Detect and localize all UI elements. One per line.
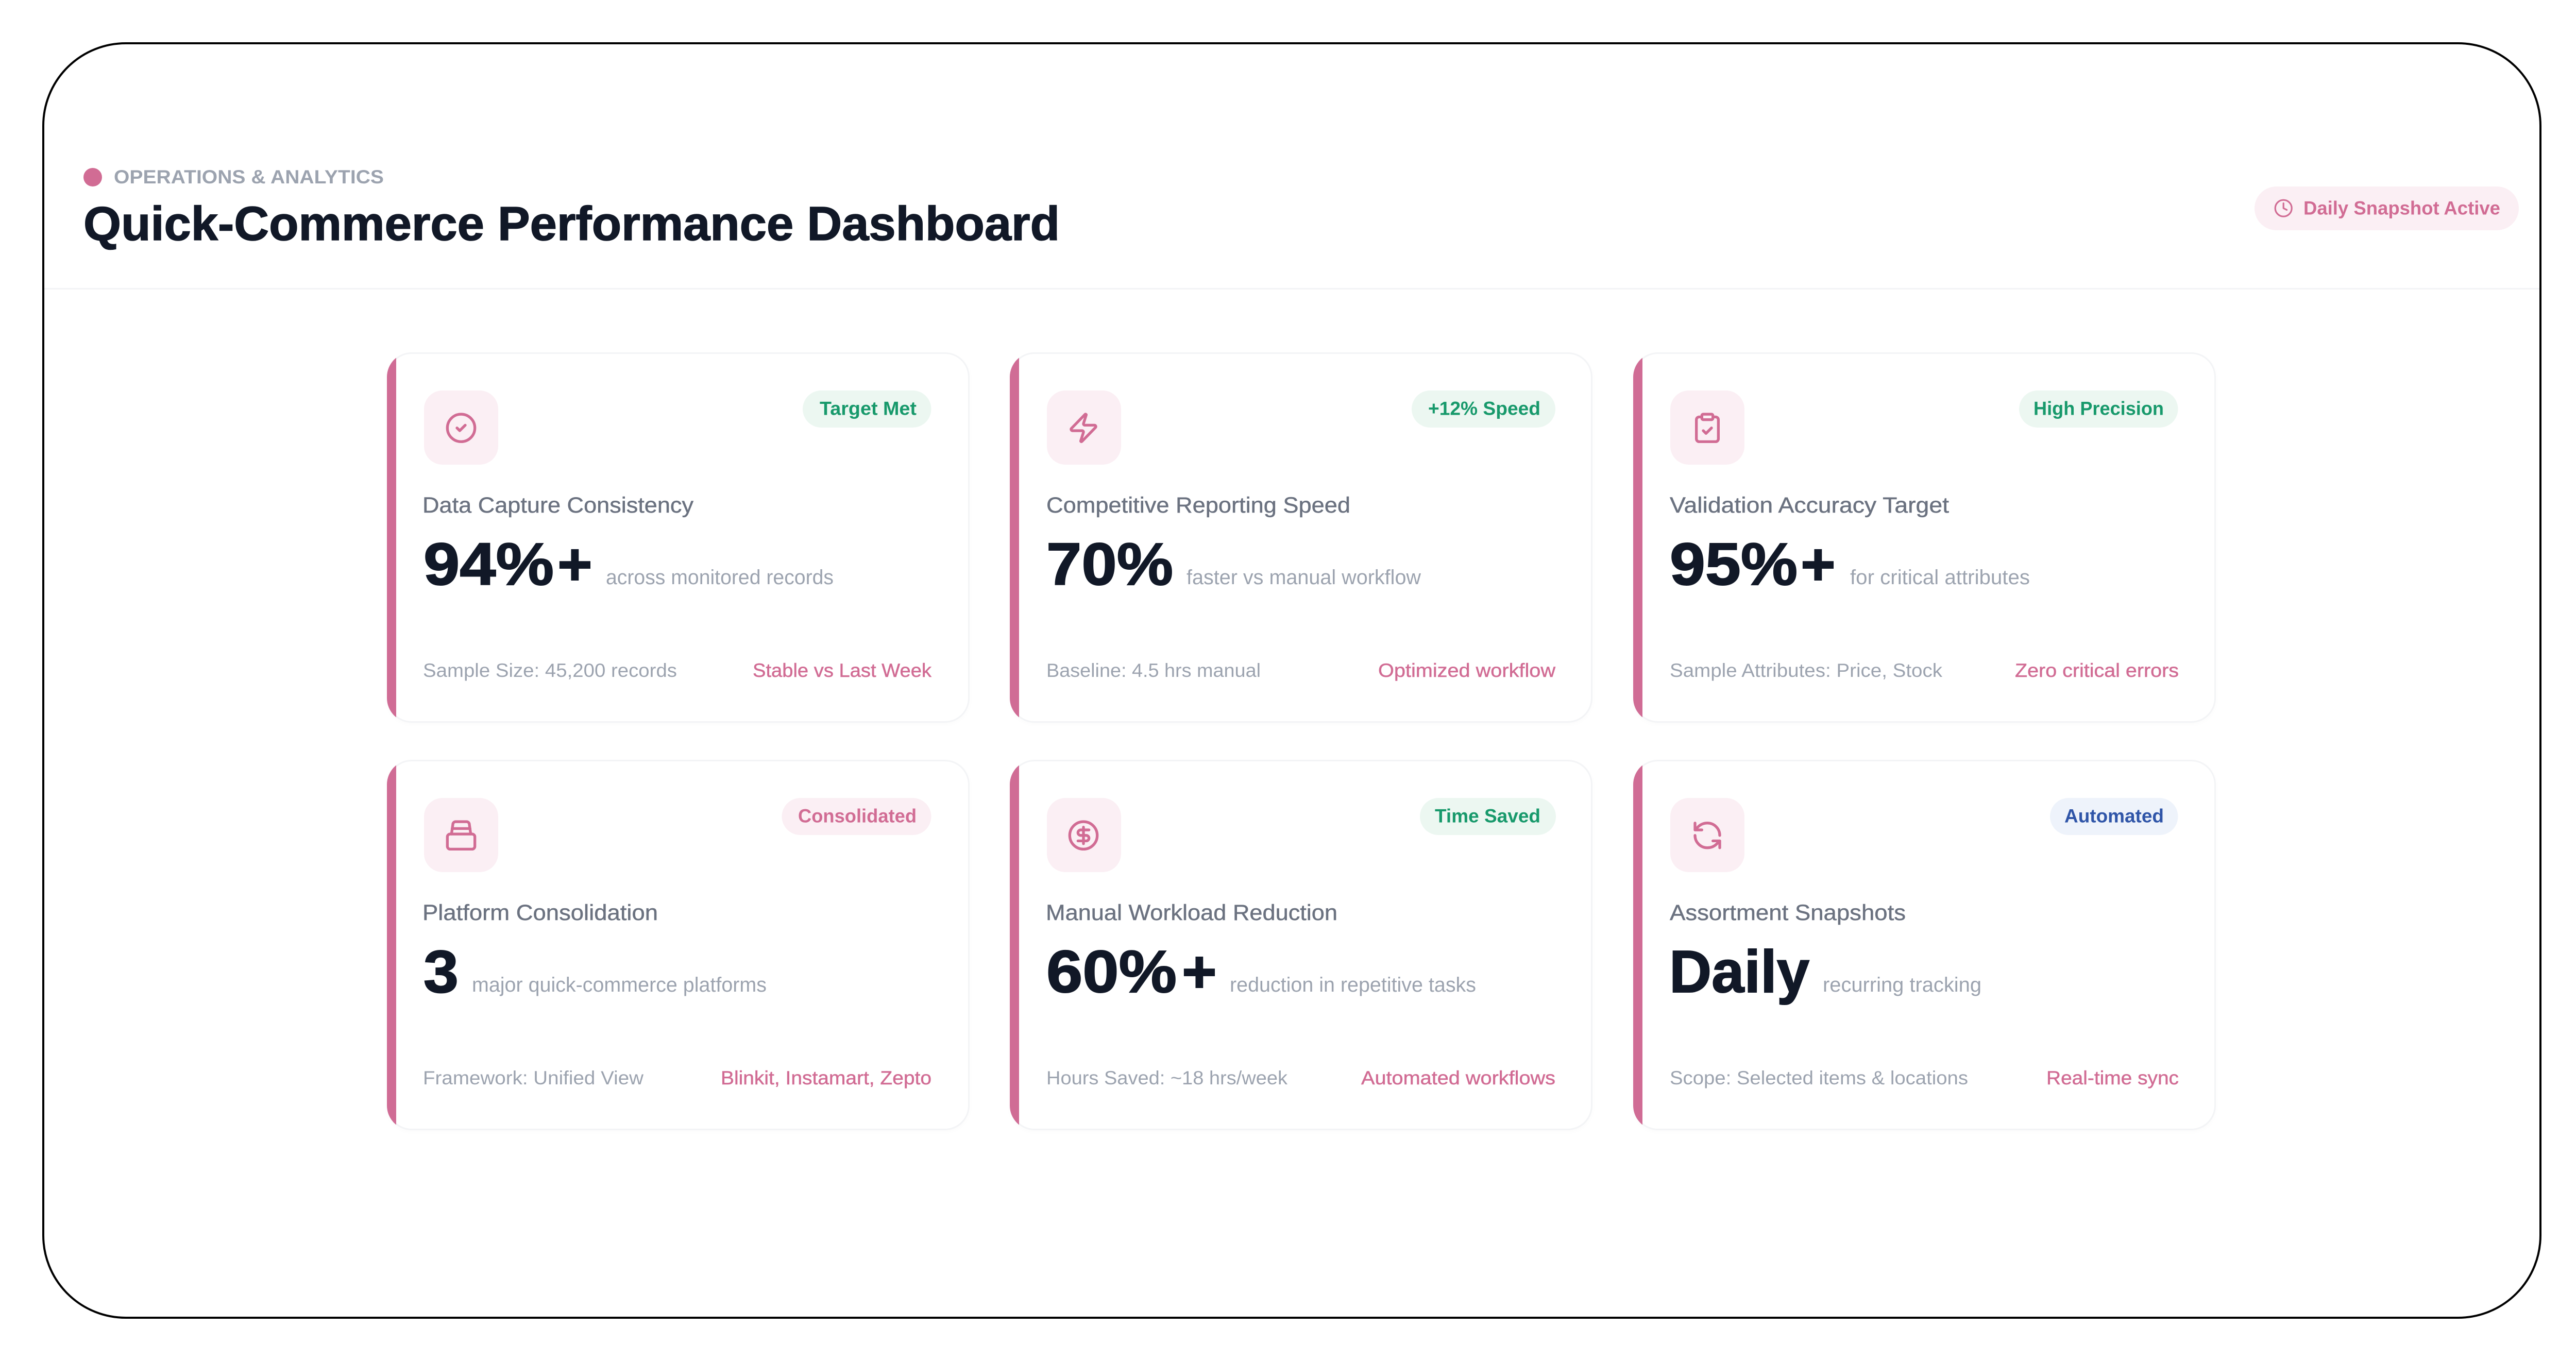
accent bar xyxy=(387,352,970,723)
icon box: clipboard check xyxy=(1670,390,1744,465)
accent bar xyxy=(387,760,970,1130)
metric value: + xyxy=(1182,938,1217,1005)
badge: target met: Target Met xyxy=(820,398,917,419)
icon box: check circle xyxy=(424,390,498,465)
icon: clock xyxy=(2275,200,2292,216)
panel: competitive reporting speed xyxy=(1010,352,1592,723)
badge: speed xyxy=(1412,390,1555,428)
metric label: Assortment Snapshots xyxy=(1670,900,1906,925)
metric value: 95% xyxy=(1670,531,1798,598)
metric value: + xyxy=(557,531,592,598)
daily snapshot pill xyxy=(2255,186,2519,230)
badge: time saved xyxy=(1420,798,1556,835)
metric label: Competitive Reporting Speed xyxy=(1046,493,1350,518)
panel: validation accuracy target xyxy=(1633,352,2216,723)
title: Quick-Commerce Performance Dashboard xyxy=(83,197,1060,250)
metric value: 70% xyxy=(1046,531,1173,598)
metric label: Data Capture Consistency xyxy=(422,493,694,518)
badge: speed: +12% Speed xyxy=(1428,398,1540,419)
footer right note: Real-time sync xyxy=(2046,1067,2179,1088)
badge: high precision xyxy=(2019,390,2178,428)
footer left note: Framework: Unified View xyxy=(423,1067,643,1088)
eyebrow label: OPERATIONS & ANALYTICS xyxy=(114,166,384,188)
badge: target met xyxy=(803,390,931,428)
panel: assortment snapshots xyxy=(1633,760,2216,1130)
footer right note: Optimized workflow xyxy=(1378,660,1555,681)
metric descriptor: for critical attributes xyxy=(1850,566,2030,589)
accent bar xyxy=(1633,760,2216,1130)
accent bar xyxy=(1633,352,2216,723)
badge: high precision: High Precision xyxy=(2033,398,2164,419)
metric descriptor: reduction in repetitive tasks xyxy=(1230,974,1476,996)
footer left note: Sample Size: 45,200 records xyxy=(423,660,677,681)
icon box: storage stack xyxy=(424,798,498,872)
icon box: refresh arrows xyxy=(1670,798,1744,872)
metric descriptor: faster vs manual workflow xyxy=(1187,566,1421,589)
panel: data capture consistency xyxy=(387,352,970,723)
metric descriptor: across monitored records xyxy=(606,566,834,589)
metric value: + xyxy=(1801,531,1836,598)
metric value: 60% xyxy=(1046,938,1177,1005)
panel: platform consolidation xyxy=(387,760,970,1130)
header xyxy=(83,166,2519,250)
footer left note: Hours Saved: ~18 hrs/week xyxy=(1046,1067,1288,1088)
badge: consolidated: Consolidated xyxy=(798,806,917,826)
icon box: lightning bolt xyxy=(1047,390,1121,465)
header divider line xyxy=(44,288,2539,290)
badge: automated: Automated xyxy=(2064,806,2164,826)
footer right note: Automated workflows xyxy=(1361,1067,1555,1088)
badge: consolidated xyxy=(782,798,931,835)
accent bar xyxy=(1010,352,1592,723)
metric value: 94% xyxy=(423,531,554,598)
panel: manual workload reduction xyxy=(1010,760,1592,1130)
metric descriptor: recurring tracking xyxy=(1823,974,1981,996)
badge: time saved: Time Saved xyxy=(1435,806,1540,826)
badge: automated xyxy=(2050,798,2178,835)
metric value: 3 xyxy=(423,938,459,1005)
eyebrow status dot xyxy=(83,168,102,186)
footer left note: Sample Attributes: Price, Stock xyxy=(1670,660,1943,681)
footer left note: Baseline: 4.5 hrs manual xyxy=(1046,660,1261,681)
metric label: Validation Accuracy Target xyxy=(1670,493,1949,518)
icon box: dollar circle xyxy=(1047,798,1121,872)
metric label: Manual Workload Reduction xyxy=(1046,900,1337,925)
metric value: Daily xyxy=(1669,938,1809,1005)
footer right note: Blinkit, Instamart, Zepto xyxy=(721,1067,931,1088)
footer left note: Scope: Selected items & locations xyxy=(1670,1067,1968,1088)
accent bar xyxy=(1010,760,1592,1130)
footer right note: Zero critical errors xyxy=(2015,660,2179,681)
metric descriptor: major quick-commerce platforms xyxy=(472,974,767,996)
pill label: Daily Snapshot Active xyxy=(2303,198,2500,218)
footer right note: Stable vs Last Week xyxy=(753,660,932,681)
metric label: Platform Consolidation xyxy=(422,900,658,925)
